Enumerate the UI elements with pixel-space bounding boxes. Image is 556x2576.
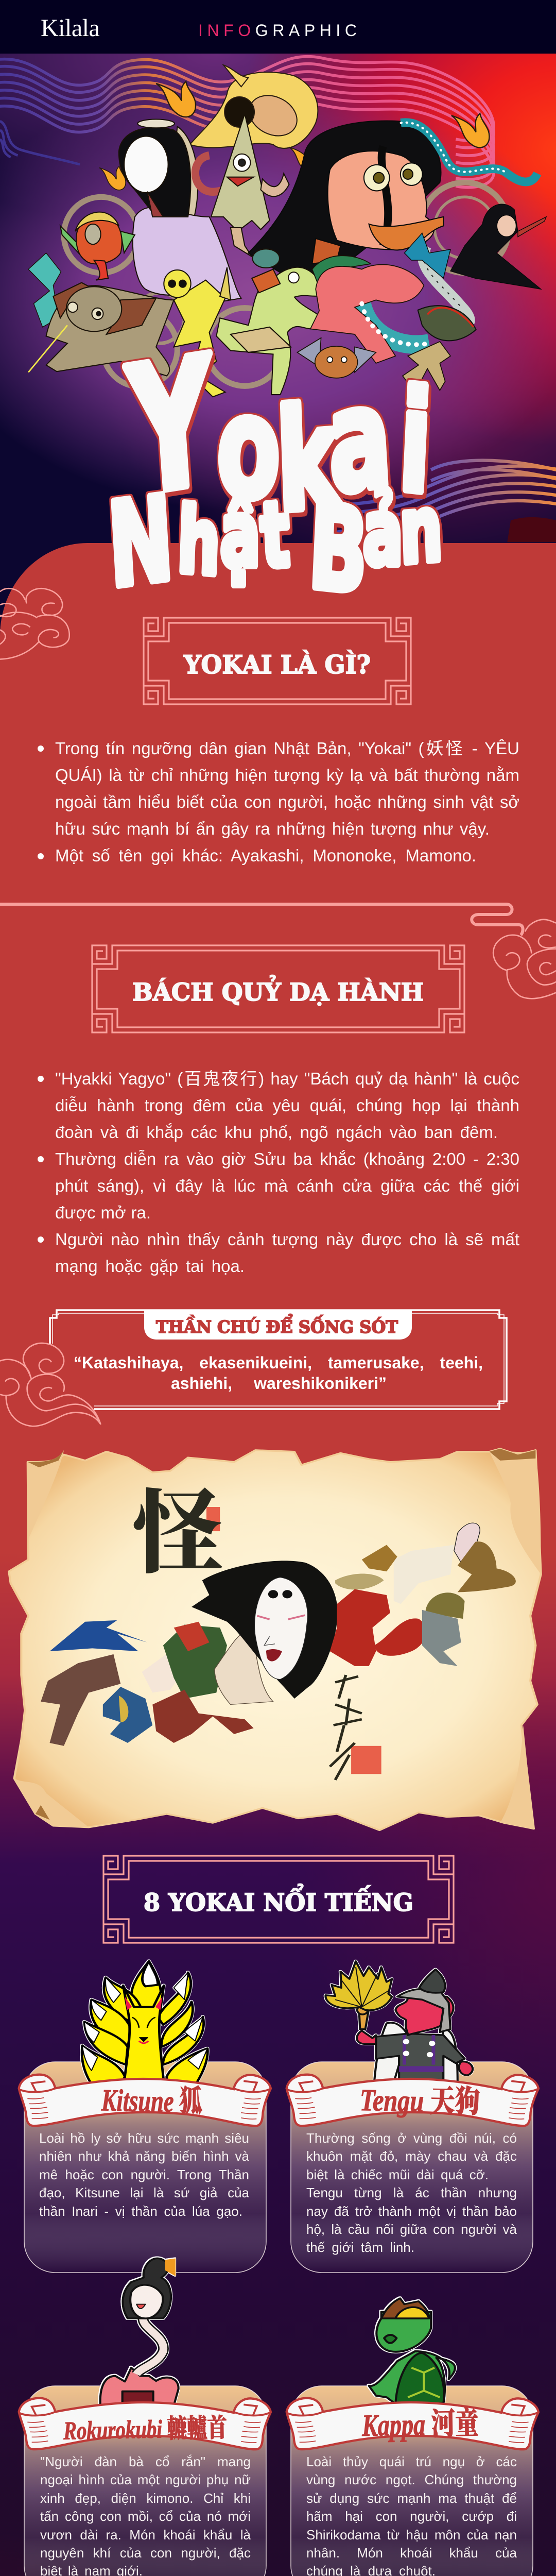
card text: Kappa: sử dụng sức mạnh ma thuật để: [306, 2490, 517, 2506]
text block: Yokai definition: ngoài tầm hiểu biết của con người, hoặc những sinh vật sở: [55, 792, 519, 811]
old man yokai: [28, 283, 174, 376]
card text: Rokurokubi: [40, 2454, 251, 2576]
character: Tengu: [325, 1961, 473, 2082]
text block: Hyakki Yagyo: phút sáng), vì đây là lúc mà cánh cửa giữa các thế giới: [55, 1176, 519, 1195]
banner title: Tengu 天狗: [359, 2075, 480, 2122]
text block: Yokai definition: QUÁI) là từ chỉ những hiện tượng kỳ lạ và bất thường nằm: [55, 766, 519, 785]
character: Rokurokubi: [100, 2258, 179, 2405]
character: Kitsune: [82, 1961, 207, 2082]
card text: Tengu: Tengu từng là ác thần nhưng: [306, 2185, 517, 2200]
hero illustration: yokai parade: [0, 55, 556, 542]
card text: Kappa: [306, 2454, 517, 2576]
banner: Rokurokubi: [19, 2398, 271, 2449]
cloud: lower left: [0, 1343, 101, 1426]
olive cloak: [418, 306, 476, 341]
text block: Hyakki Yagyo: được mở ra.: [55, 1203, 151, 1222]
paper: [9, 1449, 541, 1830]
card text: Kappa: vùng nước ngọt. Chúng thường: [306, 2472, 517, 2487]
bullet: [38, 745, 44, 752]
banner title: Kitsune 狐: [101, 2075, 203, 2122]
text block: Yokai definition: Một số tên gọi khác: Ayakashi, Mononoke, Mamono.: [55, 846, 476, 865]
card text: Kappa: nhân. Món khoái khẩu của: [306, 2545, 517, 2561]
label: infographic: INFO GRAPHIC: [198, 21, 357, 40]
card text: Rokurokubi: xinh đẹp, diện kimono. Chỉ khi: [40, 2490, 251, 2506]
text block: Yokai definition: Trong tín ngưỡng dân gian Nhật Bản, "Yokai" (妖怪 - YÊU: [55, 739, 519, 758]
card text: Tengu: khuôn mặt đỏ, mày chau và đặc: [306, 2148, 517, 2164]
card panels: [24, 2062, 533, 2576]
main panel background: [0, 543, 556, 2576]
cloud: top left: [0, 588, 70, 659]
header bar: [0, 0, 556, 54]
card text: Rokurokubi: tấn công con mồi, cổ của nó mới: [40, 2509, 251, 2524]
banner: Kitsune: [19, 2075, 271, 2126]
survival spell quote: [74, 1353, 483, 1393]
card text: Kitsune: Loài hồ ly sở hữu sức mạnh siêu: [39, 2130, 249, 2146]
survival spell quote: ashiehi, wareshikonikeri”: [171, 1374, 387, 1393]
tab text: THẦN CHÚ ĐỂ SỐNG SÓT: [156, 1313, 398, 1337]
card text: Rokurokubi: "Người đàn bà cổ rắn" mang: [40, 2454, 251, 2469]
banner title: Kappa 河童: [361, 2399, 479, 2445]
card text: Kappa: Shirikodama từ hậu môn của nạn: [306, 2527, 517, 2543]
card text: Rokurokubi: ngoại hình của một người phụ nữ: [40, 2472, 251, 2487]
card text: Tengu: thế giới tâm linh.: [306, 2240, 414, 2255]
card text: Rokurokubi: nguyên khí của con người, đặc: [40, 2545, 251, 2561]
yellow skeleton: [164, 270, 225, 397]
hair: [192, 1561, 338, 1699]
card text: Tengu: [306, 2130, 517, 2255]
text block: Hyakki Yagyo: "Hyakki Yagyo" (百鬼夜行) hay "Bách quỷ dạ hành" là cuộc: [55, 1069, 519, 1088]
survival spell tab: [144, 1310, 412, 1340]
heading frame: Bách quỷ dạ hành: [92, 945, 464, 1032]
card text: Kitsune: nhiên như khả năng biến hình và: [39, 2148, 249, 2164]
card text: Kappa: hãm hại con người, cướp đi: [306, 2509, 517, 2524]
bullet: [38, 1156, 44, 1162]
heading frame: 8 yokai nổi tiếng: [103, 1856, 454, 1943]
text block: Hyakki Yagyo: [38, 1069, 519, 1276]
survival spell box frame: [50, 1310, 507, 1409]
card text: Tengu: Thường sống ở vùng đồi núi, có: [306, 2130, 517, 2146]
card text: Tengu: nay đã trở thành một vị thần bảo: [306, 2204, 517, 2219]
heading frame: Yokai là gì: [144, 618, 411, 704]
banner: Tengu: [287, 2075, 538, 2126]
red stamps: [206, 1507, 381, 1774]
character: Kappa: [369, 2298, 455, 2404]
paper curls: [14, 1449, 541, 1829]
text block: Yokai definition: hữu sức mạnh bí ẩn gây ra những hiện tượng như vậy.: [55, 819, 490, 838]
creatures right: [330, 1523, 516, 1666]
bullet: [38, 853, 44, 859]
text block: Yokai definition: [38, 739, 519, 865]
text block: Hyakki Yagyo: mạng hoặc gặp tai họa.: [55, 1257, 245, 1276]
banner: Kappa: [287, 2398, 538, 2449]
card text: Tengu: biệt là chiếc mũi dài quá cỡ.: [306, 2167, 489, 2182]
cloud: right: [493, 920, 556, 998]
bullet: [38, 1076, 44, 1082]
card text: Kitsune: mê hoặc con người. Trong Thần: [39, 2167, 249, 2182]
logo: Kilala: Kilala: [41, 14, 99, 42]
heading text: 8 YOKAI NỔI TIẾNG: [144, 1884, 413, 1917]
card text: Kitsune: thần Inari - vị thần của lúa gạo.: [39, 2204, 242, 2219]
heading text: BÁCH QUỶ DẠ HÀNH: [132, 975, 424, 1007]
text block: Hyakki Yagyo: diễu hành trong đêm của yêu quái, chúng họp lại thành: [55, 1096, 519, 1115]
red maned dragon: [310, 256, 429, 363]
walker: [403, 342, 450, 392]
sleeve: [215, 1632, 273, 1704]
orange mask yokai: [60, 212, 135, 280]
parchment scroll illustration: [9, 1449, 541, 1830]
card text: Kappa: Loài thủy quái trú ngụ ở các: [306, 2454, 517, 2469]
text block: Hyakki Yagyo: đoàn và đi khắp các khu phố, ngõ ngách vào ban đêm.: [55, 1123, 498, 1142]
flames: [99, 81, 489, 235]
long tongue: [195, 156, 255, 192]
green goblin and rider: [216, 249, 332, 395]
cloud waves bottom right: [319, 461, 556, 544]
pale mask face: [254, 1578, 307, 1680]
umbrella yokai: [211, 114, 289, 257]
main title: Yokai Nhật Bản: [105, 330, 444, 608]
banner title: Rokurokubi 轆轤首: [63, 2407, 228, 2447]
hero background: [0, 54, 556, 646]
lantern woman: [119, 119, 241, 302]
cloud waves top: [0, 57, 494, 188]
flying hair woman: [404, 204, 546, 289]
bullet: [38, 1236, 44, 1243]
cloud waves left low: [0, 121, 80, 164]
tan rings: [64, 182, 509, 387]
divider with cloud swirl: [0, 904, 523, 935]
winged head: [297, 338, 376, 378]
text block: Hyakki Yagyo: Thường diễn ra vào giờ Sửu ba khắc (khoảng 2:00 - 2:30: [55, 1149, 519, 1168]
long-haired giant face: [248, 121, 443, 278]
serpent: [401, 123, 537, 323]
cyan creature: [28, 253, 61, 327]
text block: Hyakki Yagyo: Người nào nhìn thấy cảnh tượng này được cho là sẽ mất: [55, 1230, 519, 1249]
card text: Tengu: hộ, là cầu nối giữa con người và: [306, 2222, 517, 2237]
kanji: quái: 怪: [132, 1461, 223, 1591]
card text: Kitsune: [39, 2130, 249, 2219]
flaming head: [190, 65, 318, 148]
card text: Rokurokubi: vươn dài ra. Món khoái khẩu là: [40, 2527, 251, 2543]
signature strokes: [330, 1675, 362, 1780]
survival spell quote: “Katashihaya, ekasenikueini, tamerusake, teehi,: [74, 1353, 483, 1372]
heading text: YOKAI LÀ GÌ?: [183, 650, 371, 680]
creatures left: [41, 1620, 254, 1746]
card text: Kitsune: đạo, Kitsune lại là sứ giả của: [39, 2185, 249, 2200]
